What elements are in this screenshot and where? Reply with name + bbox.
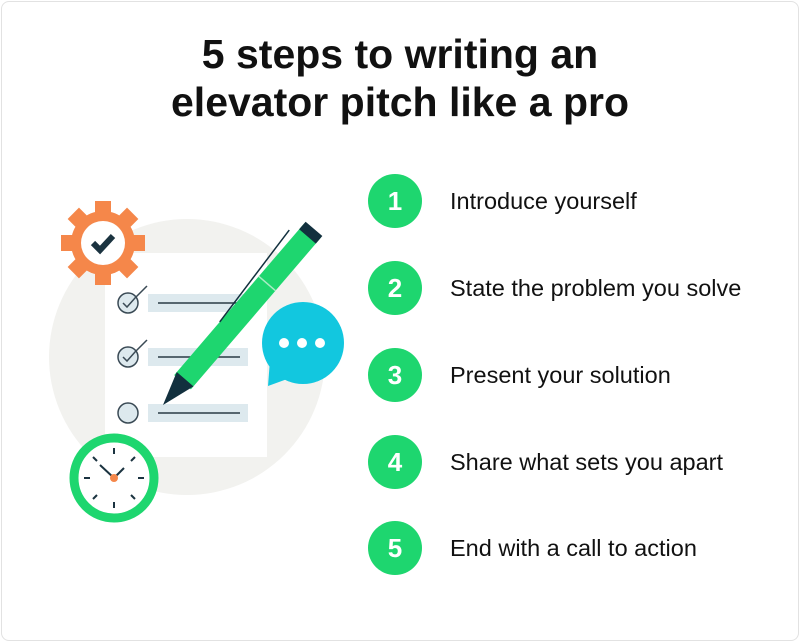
step 5 (368, 521, 697, 575)
step 3: 3 (388, 360, 402, 390)
icon: pen (149, 217, 322, 412)
icon: clock (74, 438, 154, 518)
icon: gear (61, 201, 145, 285)
title: elevator pitch like a pro (171, 79, 629, 125)
step 5: End with a call to action (450, 535, 697, 561)
step 4 (368, 435, 723, 489)
illustration (49, 201, 344, 522)
title: 5 steps to writing an (202, 31, 598, 77)
step 3: Present your solution (450, 362, 671, 388)
step 4: 4 (388, 447, 402, 477)
step 1: 1 (388, 186, 402, 216)
step 2: 2 (388, 273, 402, 303)
step 1 (368, 174, 637, 228)
step 2 (368, 261, 741, 315)
step 3 (368, 348, 671, 402)
step 2: State the problem you solve (450, 275, 741, 301)
step 4: Share what sets you apart (450, 449, 723, 475)
step 5: 5 (388, 533, 402, 563)
background circle (49, 219, 325, 495)
title (171, 31, 629, 125)
paper checklist (105, 253, 267, 457)
step 1: Introduce yourself (450, 188, 637, 214)
icon: speech bubble (262, 302, 344, 386)
